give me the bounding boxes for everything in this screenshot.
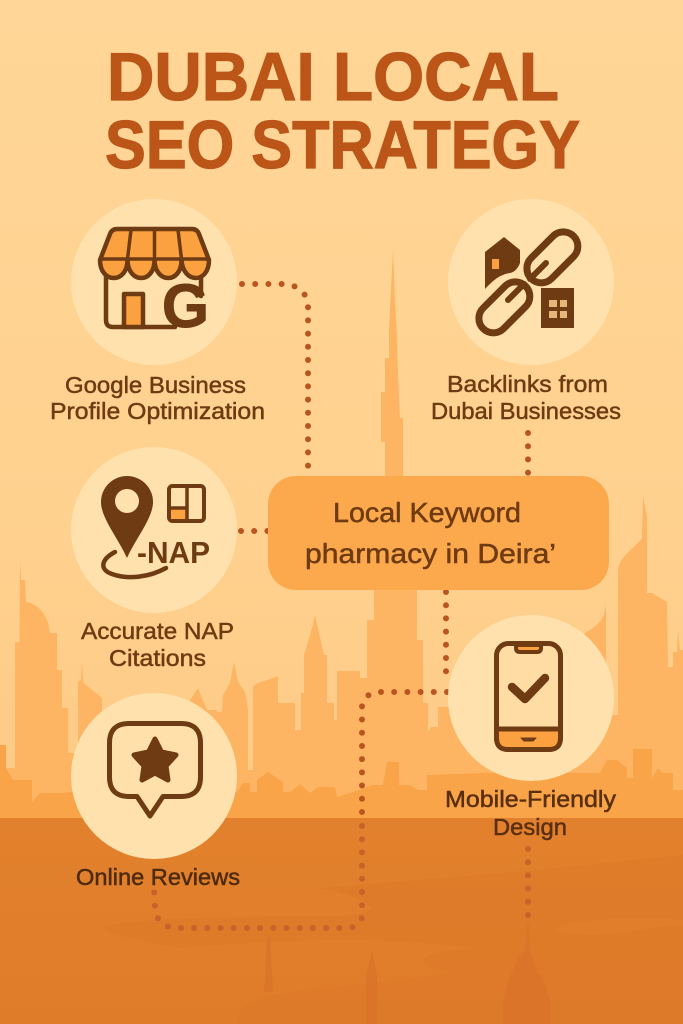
- label: [431, 371, 621, 424]
- panel: central local keyword: [268, 476, 609, 590]
- label: Mobile-Friendly: [445, 786, 616, 812]
- icon: phone with check: [496, 644, 560, 750]
- label: Citations: [109, 645, 206, 671]
- label: Backlinks from: [447, 371, 608, 397]
- icon: star speech bubble: [110, 724, 200, 816]
- panel: online reviews: [71, 693, 240, 890]
- panel: google business profile: [50, 199, 265, 424]
- label: Accurate NAP: [81, 618, 234, 644]
- title: SEO STRATEGY: [105, 107, 580, 183]
- label: Dubai Businesses: [431, 398, 621, 424]
- ground and water: [0, 818, 683, 1024]
- label: [81, 618, 234, 671]
- icon: storefront with G: [100, 229, 209, 340]
- icon: map pin with nap: -NAP: [137, 535, 210, 570]
- title: [105, 39, 580, 183]
- panel: central local keyword: Local Keyword: [333, 497, 521, 528]
- dotted connectors: [154, 284, 528, 928]
- title: DUBAI LOCAL: [107, 39, 559, 115]
- panel: accurate nap citations: [71, 447, 237, 671]
- icon: map pin with nap: [101, 476, 210, 577]
- label: Design: [493, 814, 567, 840]
- icon: chain link and buildings: [473, 226, 584, 339]
- panel: backlinks: [431, 199, 621, 424]
- label: Online Reviews: [76, 864, 240, 890]
- label: Google Business: [65, 372, 246, 398]
- label: [445, 786, 616, 840]
- panel: mobile friendly design: [445, 615, 616, 840]
- dubai skyline: [0, 250, 683, 818]
- label: [50, 372, 265, 424]
- label: Profile Optimization: [50, 398, 265, 424]
- icon: storefront with G: G: [162, 272, 209, 340]
- panel: central local keyword: pharmacy in Deira’: [305, 538, 556, 569]
